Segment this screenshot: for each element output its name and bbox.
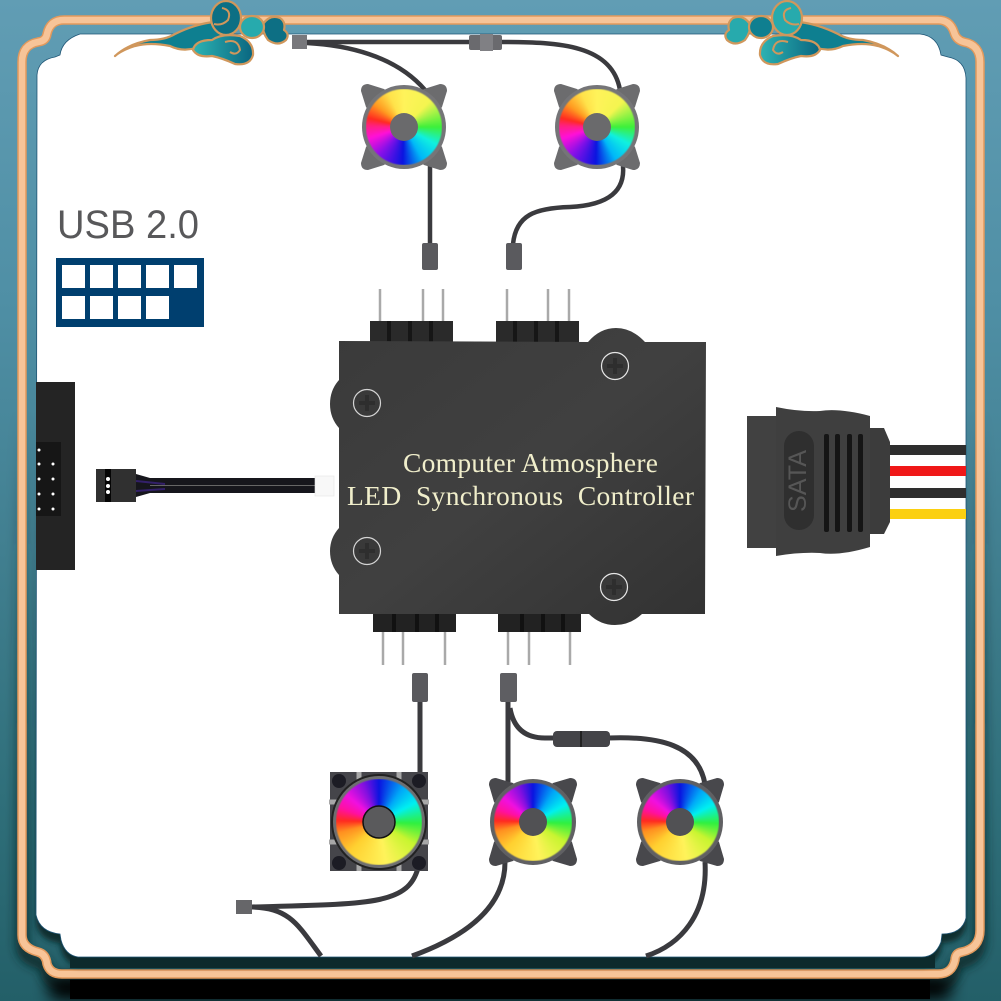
controller title bbox=[347, 447, 694, 511]
top fan cables bbox=[307, 42, 623, 244]
motherboard USB header bbox=[36, 382, 75, 570]
controller title: Computer Atmosphere bbox=[403, 447, 658, 478]
fan: bottom middle bbox=[489, 778, 577, 866]
USB cable to controller bbox=[96, 469, 334, 502]
fan: bottom right bbox=[636, 778, 724, 866]
bottom fan cables bbox=[252, 700, 705, 956]
controller body bbox=[330, 328, 706, 625]
USB 2.0 pinout diagram bbox=[56, 258, 204, 327]
cloud ornament: top right bbox=[725, 1, 898, 64]
SATA power connector bbox=[747, 407, 966, 556]
fan: top right bbox=[554, 84, 640, 170]
bottom black band bbox=[70, 980, 930, 999]
fan: top left bbox=[361, 84, 447, 170]
controller pin headers top bbox=[370, 289, 579, 342]
controller pin headers bottom bbox=[373, 614, 581, 665]
bottom black band soft edge bbox=[50, 978, 950, 1000]
bottom cable connectors bbox=[236, 673, 610, 914]
controller screws bbox=[354, 352, 628, 600]
fan: bottom square bbox=[329, 772, 429, 871]
SATA power connector: SATA bbox=[784, 450, 812, 512]
cloud ornament: top left bbox=[115, 1, 288, 64]
bottom dark strip bbox=[70, 955, 935, 968]
top cable connectors bbox=[292, 34, 522, 270]
controller title: LED Synchronous Controller bbox=[347, 480, 694, 511]
heading: USB 2.0: USB 2.0 bbox=[57, 203, 199, 247]
